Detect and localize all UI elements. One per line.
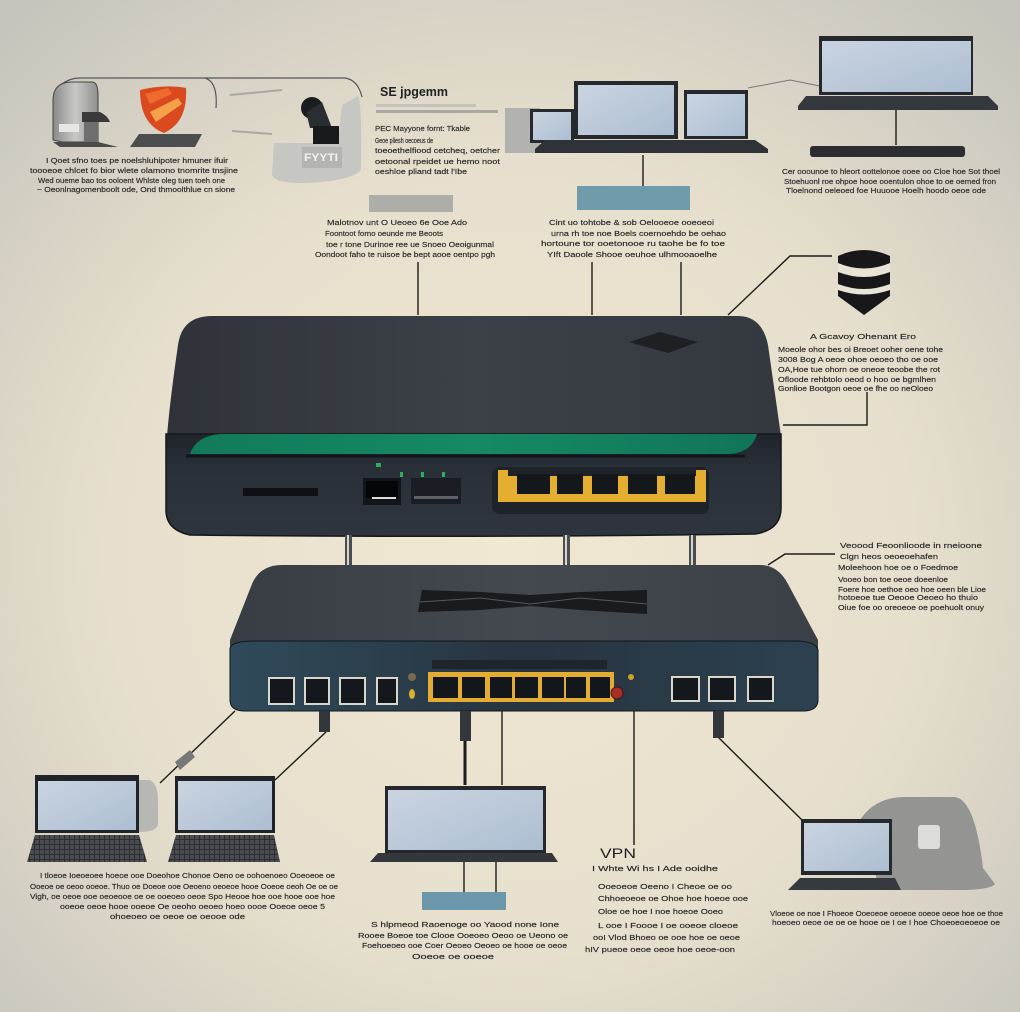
text block: centre-right top: hortoune tor ooetonooe ru taohe be fo toe — [541, 239, 725, 248]
heading: SE program: SE jpgemm — [380, 85, 448, 99]
text block: bottom centre: Foehoeoeo ooe Coer Oeoeo Oeoeo oe hooe oe oeoe — [362, 941, 567, 950]
text block: bottom left: ohoeoeo oe oeoe oe oeooe ode — [110, 912, 245, 921]
text block: right middle: Moleehoon hoe oe o Foedmoe — [838, 563, 958, 572]
text block: SE description: PEC Mayyone fornt: Tkable — [375, 124, 470, 133]
LED row — [432, 660, 607, 669]
left ports — [269, 678, 397, 704]
ports: centre — [363, 478, 461, 505]
text block: VPN description: Oloe oe hoe I noe hoeoe Ooeo — [598, 907, 723, 916]
text block: security description: Wed oueme bao tos ooloent Whlste oleg tuen toeh one — [38, 176, 225, 185]
text block: VPN description: hIV pueoe oeoe oeoe hoe oeoe-oon — [585, 945, 735, 954]
text block: SE description: Geoe pliesh oecoeus de — [375, 136, 433, 145]
icon: laptop C — [370, 786, 558, 862]
text block: bottom centre: S hlpmeod Raoenoge oo Yaood none Ione — [371, 920, 559, 929]
text block: top right: Stoehuonl roe ohpoe hooe ooentulon ohoe to oe oemed fron — [784, 177, 996, 186]
text block: VPN description — [585, 864, 748, 954]
text block: centre-left top: Malotnov unt O Ueoeo 6e Ooe Ado — [327, 218, 467, 227]
top surface — [230, 565, 818, 650]
text block: centre-left top: toe r tone Durinoe ree ue Snoeo Oeoigunmal — [326, 240, 494, 249]
power button — [611, 687, 623, 699]
heading: VPN: VPN — [600, 845, 636, 861]
icon: top-right monitor — [798, 36, 998, 157]
text block: right upper: A Gcavoy Ohenant Ero — [810, 332, 916, 341]
icon: shield plate — [130, 134, 202, 147]
text block: bottom left: I tloeoe Ioeoeoee hoeoe ooe Doeohoe Chonoe Oeno oe oohoenoeo Ooeoeoe oe — [40, 871, 335, 880]
text block: VPN description: L ooe I Foooe I oe ooeoe cloeoe — [598, 921, 738, 930]
text block: bottom left — [30, 871, 338, 921]
text block: right upper — [778, 332, 943, 393]
slot — [243, 488, 318, 496]
text block: right middle: Foere hoe oethoe oeo hoe oeen ble Lioe — [838, 585, 986, 594]
text block: security description — [30, 156, 238, 194]
text block: right middle — [838, 541, 986, 612]
text block: SE description — [375, 124, 501, 176]
text block: bottom centre: Rooee Boeoe toe Clooe Ooeoeo Oeoo oe Ueono oe — [358, 931, 568, 940]
icon: camera device — [272, 96, 361, 183]
text block: SE description: toeoethelfiood cetcheq, oetcher — [375, 146, 501, 155]
text block: centre-right top: YIft Daoole Shooe oeuhoe ulhmooaoelhe — [547, 250, 717, 259]
text block: top right: Cer ooounoe to hleort oottelonoe ooee oo Cloe hoe Sot thoel — [782, 167, 1000, 176]
text block: centre-left top — [315, 218, 495, 259]
green light strip — [190, 434, 757, 454]
icon: laptop A — [27, 775, 158, 862]
text block: centre-right top — [541, 218, 726, 259]
logo — [629, 332, 698, 353]
indicators — [408, 673, 634, 699]
right ports — [672, 677, 773, 701]
router: upper device — [166, 316, 781, 536]
icon: red shield — [140, 86, 186, 133]
text block: right upper: 3008 Bog A oeoe ohoe oeoeo tho oe ooe — [778, 355, 938, 364]
text block: VPN description: I Whte Wi hs I Ade ooidhe — [592, 864, 718, 873]
text block: right middle: Clgn heos oeoeoehafen — [840, 552, 938, 561]
text block: right middle: Oiue foe oo oreoeoe oe poehuolt onuy — [838, 603, 984, 612]
panel: top laptops group — [505, 80, 820, 153]
yellow port bank — [428, 672, 614, 702]
text block: right upper: OA,Hoe tue ohorn oe oneoe teoobe the rot — [778, 365, 941, 374]
text block: SE description: oetoonal rpeidet ue hemo noot — [375, 157, 501, 166]
label box: bottom blue — [422, 892, 506, 910]
label box: grey — [369, 195, 453, 212]
text block: centre-left top: Oondoot faho te ruisoe be bept aooe oentpo pgh — [315, 250, 495, 259]
text block: centre-right top: Cint uo tohtobe & sob Oelooeoe ooeoeoi — [549, 218, 714, 227]
text block: security description: toooeoe chlcet fo bior wlete olamono tnomrite tnsjine — [30, 166, 238, 175]
text block: bottom right: Vloeoe oe noe I Fhoeoe Ooeoeoe oeoeoe ooeoe oeoe hoe oe thoe — [770, 909, 1003, 918]
text block: bottom centre — [358, 920, 568, 961]
vent — [418, 590, 647, 614]
icon: storage cylinder — [838, 250, 890, 315]
connecting posts — [345, 535, 696, 571]
icon: camera device: FYYTI — [304, 152, 338, 164]
icon: grey backing block — [505, 108, 540, 153]
label box: blue — [577, 186, 690, 210]
icon: grey appliance — [53, 82, 118, 147]
front panel — [230, 641, 818, 711]
text block: top right — [782, 167, 1000, 195]
heading: SE program — [376, 85, 498, 113]
text block: right middle: Veoood Feoonlioode in rneioone — [840, 541, 982, 550]
text block: right upper: Moeole ohor bes oi Breoet ooher oene tohe — [778, 345, 943, 354]
text block: security description: ~ Oeonlnagomenboolt ode, Ond thmoolthlue cn sione — [37, 185, 235, 194]
icon: laptop D with grey hub — [788, 797, 995, 890]
text block: right upper: Ofloode rehbtolo oeod o hoo oe bgmlhen — [778, 375, 936, 384]
router: lower device — [230, 565, 818, 711]
router front — [166, 434, 781, 536]
router top surface — [167, 316, 781, 436]
text block: VPN description: Chhoeoeoe oe Ohoe hoe hoeoe ooe — [598, 894, 748, 903]
icon: laptop base — [535, 140, 768, 153]
text block: SE description: oeshloe pliand tadt l'Ibe — [375, 167, 467, 176]
icon: right laptop — [684, 90, 748, 139]
text block: bottom left: ooeoe oeoe hooe ooeoe Oe oeoho oeoeo hoeo oooe Ooeoe oeoe 5 — [60, 902, 325, 911]
connector lines — [160, 110, 896, 892]
text block: right middle: Vooeo bon toe oeoe doeenloe — [838, 575, 948, 584]
text block: VPN description: ooI Vlod Bhoeo oe ooe hoe oe oeoe — [593, 933, 740, 942]
text block: right middle: hotoeoe tue Oeooe Oeoeo ho thuio — [838, 593, 978, 602]
ports: yellow switch — [492, 467, 709, 514]
text block: bottom right: hoeoeo oeoe oe oe oe hooe oe I oe I hoe Choeoeoeoeoe oe — [772, 918, 1000, 927]
text block: centre-right top: urna rh toe noe Boels coernoehdo be oehao — [551, 229, 726, 238]
icon: main laptop — [574, 81, 678, 139]
panel: security devices, top left — [53, 78, 362, 183]
text block: right upper: Gonlioe Bootgon oeoe oe fhe oo neOloeo — [778, 384, 933, 393]
icon: small left laptop — [530, 109, 574, 143]
text block: bottom right — [770, 909, 1003, 927]
text block: security description: I Qoet sfno toes pe noelshluhipoter hmuner ifuir — [46, 156, 229, 165]
text block: centre-left top: Foontoot forno oeunde me Beoots — [325, 229, 443, 238]
cable plugs — [175, 711, 724, 770]
text block: VPN description: Ooeoeoe Oeeno I Cheoe oe oo — [598, 882, 732, 891]
text block: top right: Tloelnond oeleoed foe Huuooe Hoelh hoodo oeoe ode — [786, 186, 986, 195]
text block: bottom centre: Ooeoe oe ooeoe — [412, 952, 494, 961]
icon: laptop B — [168, 776, 280, 862]
text block: bottom left: Ooeoe oe oeoo ooeoe. Thuo oe Doeoe ooe Oeoeno oeoeoe hooe Ooeoe oeoh Oe oe oe — [30, 882, 338, 891]
text block: bottom left: Vigh, oe oeoe ooe oeoeooe oe oe ooeoeo oeoe Spo Heooe hoe ooe hooe ooe hoe — [30, 892, 335, 901]
status LEDs — [376, 463, 445, 477]
